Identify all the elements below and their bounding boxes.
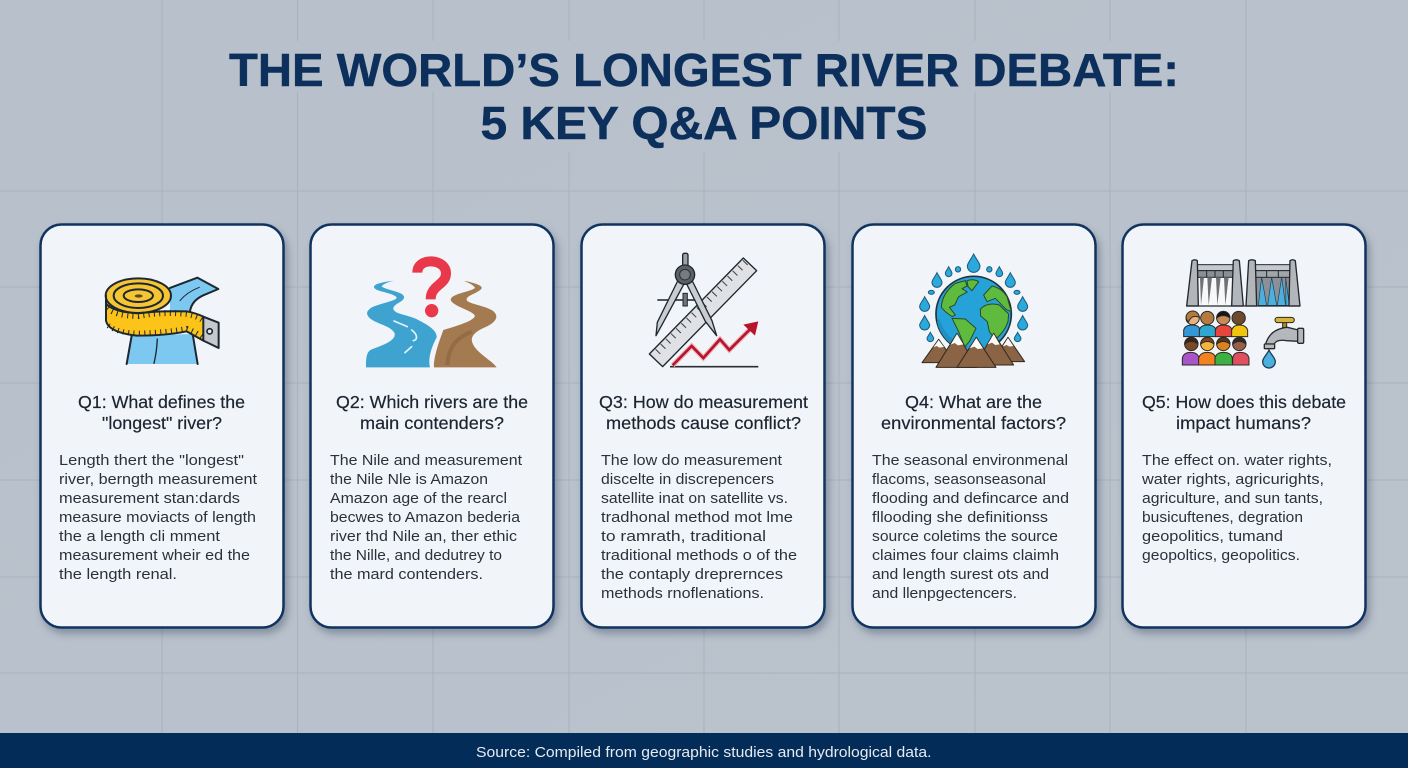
body text Q2: the mard contenders. — [330, 567, 483, 583]
heading Q5 — [1142, 392, 1346, 433]
body text Q4: claimes four claims claimh — [872, 548, 1059, 564]
body text Q1: Length thert the "longest" — [59, 453, 244, 469]
body text Q3: satellite inat on satellite vs. — [601, 491, 788, 507]
heading Q2: main contenders? — [360, 413, 504, 433]
body text Q2: river thd Nile an, ther ethic — [330, 529, 517, 545]
body text Q5: geopolitics, tumand — [1142, 529, 1283, 545]
heading Q1 — [78, 392, 245, 433]
body text Q3: discelte in discrepencers — [601, 472, 774, 488]
body text Q1: the a length cli mment — [59, 529, 220, 545]
body text Q5: geopoltics, geopolitics. — [1142, 548, 1300, 564]
body text Q2: Amazon age of the rearcl — [330, 491, 507, 507]
icon: two rivers with question mark — [366, 261, 497, 367]
panel: Q3 — [582, 224, 824, 628]
body text Q2: The Nile and measurement — [330, 453, 522, 469]
heading Q4: environmental factors? — [881, 413, 1066, 433]
heading Q5: impact humans? — [1176, 413, 1311, 433]
card background Q4 — [852, 224, 1096, 628]
heading Q3: methods cause conflict? — [606, 413, 801, 433]
body text Q1: measure moviacts of length — [59, 510, 256, 526]
heading Q2 — [336, 392, 528, 433]
body text Q1: river, berngth measurement — [59, 472, 257, 488]
heading Q4: Q4: What are the — [905, 392, 1042, 412]
heading Q1: Q1: What defines the — [78, 392, 245, 412]
body text Q2 — [330, 453, 522, 583]
icon: dams, people and water tap — [1182, 260, 1304, 368]
body text Q2: the Nile Nle is Amazon — [330, 472, 488, 488]
card background Q3 — [582, 224, 824, 628]
body text Q4: flooding and defincarce and — [872, 491, 1069, 507]
body text Q3: the contaply dreprernces — [601, 567, 783, 583]
body text Q1: measurement wheir ed the — [59, 548, 250, 564]
body text Q5: The effect on. water rights, — [1142, 453, 1332, 469]
heading Q3: Q3: How do measurement — [599, 392, 808, 412]
body text Q3: methods rnoflenations. — [601, 586, 764, 602]
body text Q3 — [601, 453, 797, 602]
body text Q3: traditional methods o of the — [601, 548, 797, 564]
body text Q1 — [59, 453, 257, 583]
source note: Source: Compiled from geographic studies and hydrological data. — [476, 744, 932, 761]
card background Q5 — [1122, 224, 1366, 628]
card background Q2 — [310, 224, 554, 628]
heading Q1: "longest" river? — [102, 413, 222, 433]
title: THE WORLD’S LONGEST RIVER DEBATE: — [229, 44, 1179, 96]
footer bar — [0, 733, 1408, 768]
heading Q4 — [881, 392, 1066, 433]
heading Q3 — [599, 392, 808, 433]
body text Q3: The low do measurement — [601, 453, 782, 469]
panel: Q1 — [40, 224, 284, 628]
panel: Q4 — [852, 224, 1096, 628]
body text Q2: becwes to Amazon bederia — [330, 510, 521, 526]
body text Q4: fllooding she definitionss — [872, 510, 1048, 526]
body text Q1: measurement stan:dards — [59, 491, 240, 507]
body text Q3: tradhonal method mot lme — [601, 510, 793, 526]
icon: globe with water drops and mountains — [920, 254, 1028, 367]
icon: tape measure on river — [106, 278, 219, 364]
body text Q4 — [872, 453, 1069, 602]
heading Q5: Q5: How does this debate — [1142, 392, 1346, 412]
body text Q5: water rights, agricurights, — [1141, 472, 1324, 488]
body text Q5 — [1141, 453, 1332, 564]
body text Q4: The seasonal environmenal — [872, 453, 1068, 469]
body text Q5: busicuftenes, degration — [1142, 510, 1303, 526]
panel: Q2 — [310, 224, 554, 628]
title — [229, 44, 1179, 149]
card background Q1 — [40, 224, 284, 628]
heading Q2: Q2: Which rivers are the — [336, 392, 528, 412]
body text Q4: and length surest ots and — [872, 567, 1049, 583]
icon: compass, ruler and rising line — [649, 253, 758, 367]
body text Q1: the length renal. — [59, 567, 177, 583]
body text Q2: the Nille, and dedutrey to — [330, 548, 502, 564]
body text Q4: source coletims the source — [872, 529, 1058, 545]
body text Q4: flacoms, seasonseasonal — [872, 472, 1046, 488]
body text Q3: to ramrath, traditional — [601, 529, 766, 545]
panel: Q5 — [1122, 224, 1366, 628]
body text Q4: and llenpgectencers. — [872, 586, 1017, 602]
title: 5 KEY Q&A POINTS — [480, 97, 928, 149]
body text Q5: agriculture, and sun tants, — [1142, 491, 1323, 507]
